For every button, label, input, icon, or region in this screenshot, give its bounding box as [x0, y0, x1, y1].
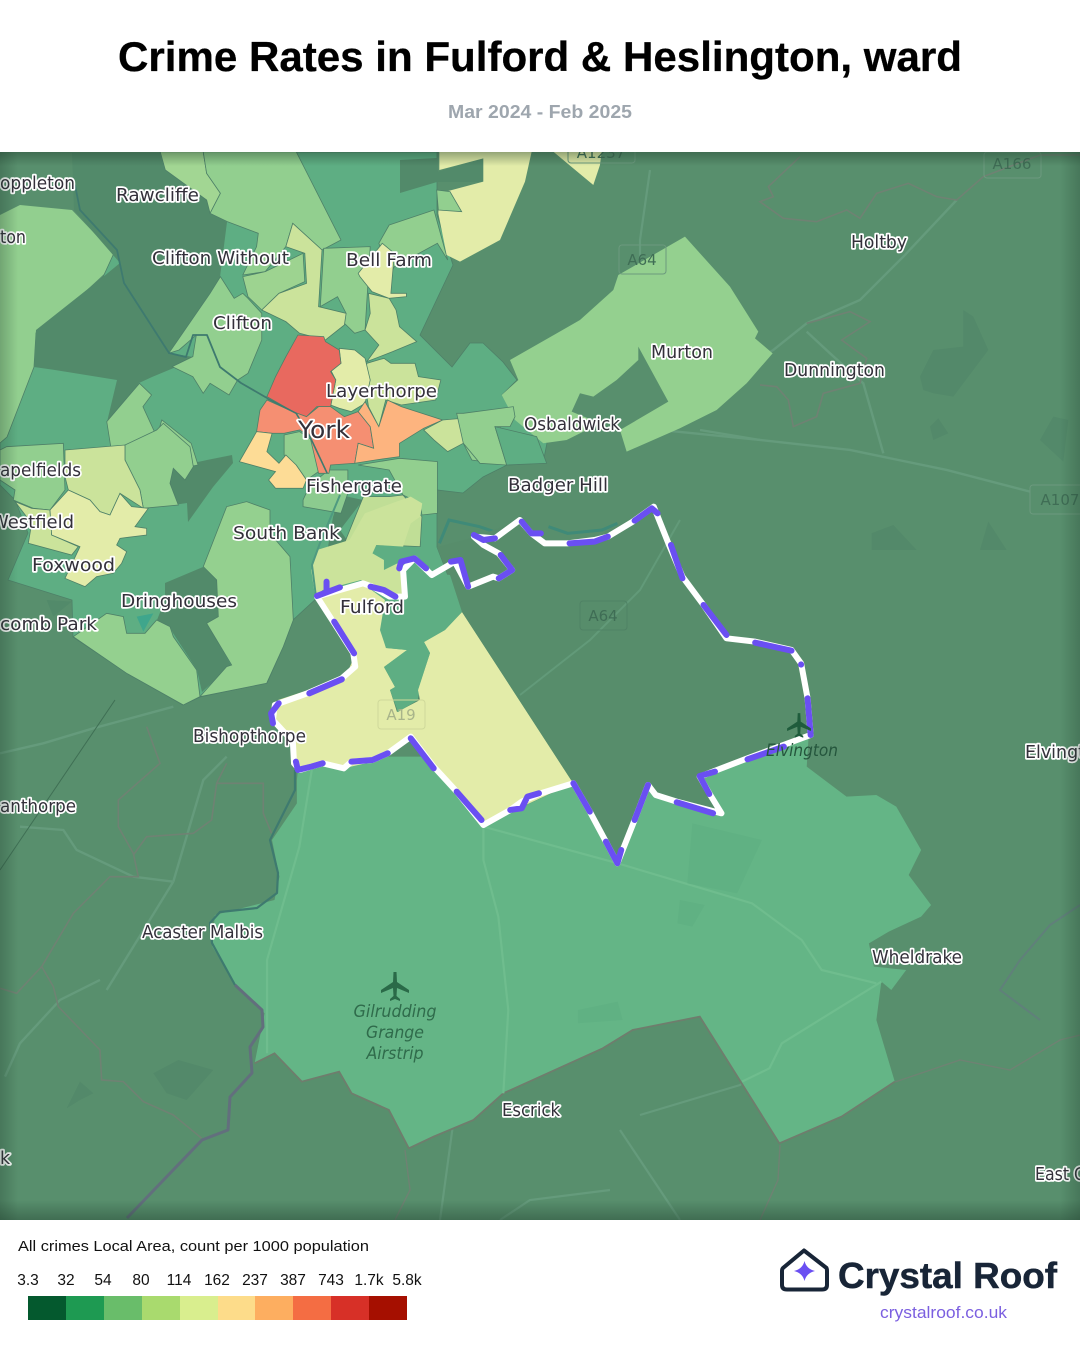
title: Crime Rates in Fulford & Heslington, ward [118, 33, 962, 80]
map: south-east low-crime ward area [212, 735, 931, 1148]
place name labels [0, 174, 1080, 1185]
map panel [0, 140, 1080, 1220]
map: light orange area [239, 432, 307, 488]
road label A19: A19 [386, 706, 416, 724]
legend tick values: 1.7k [354, 1272, 384, 1289]
map edge vignette [0, 152, 1080, 1220]
place name labels: Badger Hill [508, 476, 608, 496]
road label A166: A166 [993, 155, 1031, 173]
place name labels: Escrick [502, 1101, 561, 1121]
place name labels: Osbaldwick [524, 415, 621, 435]
legend tick values [17, 1272, 422, 1289]
Elvington airfield label: Elvington [766, 741, 838, 760]
legend tick values: 237 [242, 1272, 268, 1289]
place name labels: South Bank [233, 524, 341, 544]
place name labels: York [297, 416, 350, 444]
road label A1237: A1237 [577, 144, 625, 162]
legend tick values: 80 [132, 1272, 150, 1289]
place name labels: Rawcliffe [116, 186, 199, 206]
road shields [378, 140, 1080, 729]
map: selected ward Fulford yellow [272, 583, 573, 824]
icon: Gilrudding Grange plane [381, 972, 409, 1001]
place name labels: Dunnington [784, 361, 885, 381]
map: pale yellow Bell Farm and Layerthorpe [331, 243, 406, 412]
place name labels: Foxwood [32, 556, 115, 576]
road label A64 centre [580, 601, 627, 630]
legend tick values: 32 [57, 1272, 75, 1289]
map: eastern urban patches and Murton [437, 152, 773, 465]
place name labels: Holtby [851, 233, 907, 253]
place name labels: ton [0, 228, 26, 248]
place name labels: oppleton [0, 174, 75, 194]
place name labels: Layerthorpe [326, 382, 437, 402]
place name labels: Wheldrake [872, 948, 962, 968]
map: light green Poppleton area [0, 205, 120, 443]
map: western neighbourhoods [0, 423, 293, 705]
map: orange area [355, 400, 443, 463]
legend tick values: 387 [280, 1272, 306, 1289]
map: east countryside fields, roads, boundaries [672, 154, 1080, 492]
road label A64 centre: A64 [588, 607, 618, 625]
airstrip label: Airstrip [366, 1044, 424, 1063]
place name labels: Acaster Malbis [142, 923, 263, 943]
logo url: crystalroof.co.uk [880, 1304, 1008, 1322]
place name labels: Bishopthorpe [193, 727, 306, 747]
legend tick values: 54 [94, 1272, 112, 1289]
place name labels: k [0, 1149, 11, 1169]
map: mid-green urban area [0, 152, 547, 712]
map: city centre orange-red [257, 400, 374, 473]
map: neighbourhood patches (transcribed from crop coordinates) [107, 152, 506, 547]
map: grey-brown boundary south [395, 1035, 1080, 1220]
map: south-west countryside roads and boundaries [0, 700, 272, 1138]
road label A1237 [568, 152, 636, 164]
road label A166 [984, 152, 1041, 178]
place name labels: Fishergate [306, 477, 402, 497]
place name labels: anthorpe [0, 797, 76, 817]
map: roads across the southern area [267, 770, 881, 1093]
map: Fulford mid-green wedge [380, 570, 462, 712]
road label A1079: A107 [1041, 491, 1079, 509]
map: yellow-green areas [262, 223, 482, 452]
map: light green northern areas [107, 152, 506, 547]
airstrip label: Grange [366, 1023, 424, 1042]
legend tick values: 743 [318, 1272, 344, 1289]
legend tick values: 162 [204, 1272, 230, 1289]
road label A1079 [1030, 485, 1080, 514]
map: River Ouse [75, 185, 1080, 1218]
icon: Elvington airfield plane [787, 713, 811, 738]
place name labels: Dringhouses [121, 592, 237, 612]
legend tick values: 114 [167, 1272, 192, 1289]
place name labels: Clifton [213, 314, 272, 334]
map: faint roads near the ward and south [440, 170, 753, 1220]
legend title: All crimes Local Area, count per 1000 population [18, 1238, 369, 1255]
place name labels: comb Park [0, 615, 98, 635]
place name labels: Fulford [340, 598, 404, 618]
road label A19 [378, 700, 425, 729]
place name labels: apelfields [0, 461, 81, 481]
logo: house with star icon [782, 1250, 827, 1290]
map: Fulford yellow-green strip north of the ward [311, 497, 617, 598]
legend tick values: 3.3 [17, 1272, 39, 1289]
place name labels: Bell Farm [346, 251, 432, 271]
map: river reach near ward north edge [439, 520, 617, 543]
airstrip label [354, 1002, 436, 1063]
place name labels: Clifton Without [152, 249, 289, 269]
logo wordmark: Crystal Roof [838, 1255, 1058, 1296]
ward boundary white and purple dashes [271, 507, 811, 863]
place name labels: Murton [651, 343, 713, 363]
road label A64 north [619, 245, 666, 274]
legend tick values: 5.8k [392, 1272, 422, 1289]
airstrip label: Gilrudding [354, 1002, 436, 1021]
map: faint roads inside Heslington [520, 520, 680, 695]
map: field patches in the southern area [688, 883, 690, 884]
map: city centre red [267, 335, 341, 417]
map: dark low-crime areas inside the urban area [34, 154, 436, 692]
legend colour scale [28, 1296, 407, 1320]
subtitle: date range: Mar 2024 - Feb 2025 [448, 102, 632, 122]
map: selected ward Heslington dark fill [437, 530, 667, 796]
road label A64 north: A64 [627, 251, 657, 269]
map: pale yellow sliver at top [553, 152, 602, 185]
map: pale yellow northern area [438, 152, 532, 262]
